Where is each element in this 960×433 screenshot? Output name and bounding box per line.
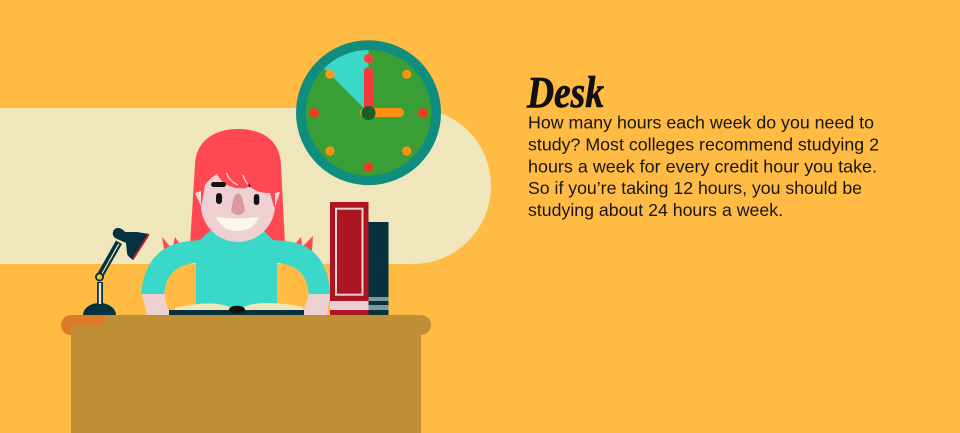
eyebrow [211, 182, 226, 187]
shirt [141, 231, 330, 311]
desk [61, 315, 431, 433]
open book [169, 303, 304, 315]
beige background band [0, 108, 491, 264]
forearms [142, 294, 330, 315]
body text: hours a week for every credit hour you take. [528, 156, 877, 176]
icon: desk lamp [83, 228, 150, 315]
nose [231, 194, 245, 215]
hair strands [226, 173, 249, 185]
hair spikes [162, 236, 313, 251]
icon: wall clock [296, 40, 441, 185]
dark book [368, 222, 388, 315]
eyes [216, 193, 222, 204]
face [201, 170, 275, 242]
red book [330, 202, 368, 315]
body text: studying about 24 hours a week. [528, 200, 783, 220]
bangs [197, 160, 278, 208]
smile [216, 217, 259, 231]
body text: How many hours each week do you need to [528, 112, 874, 132]
body text [528, 112, 879, 220]
body text: So if you’re taking 12 hours, you should be [528, 178, 862, 198]
body text: study? Most colleges recommend studying 2 [528, 134, 879, 154]
hair [190, 129, 285, 245]
heading: Desk [526, 68, 604, 117]
illustration: student at desk [141, 129, 330, 315]
ears [195, 191, 280, 207]
